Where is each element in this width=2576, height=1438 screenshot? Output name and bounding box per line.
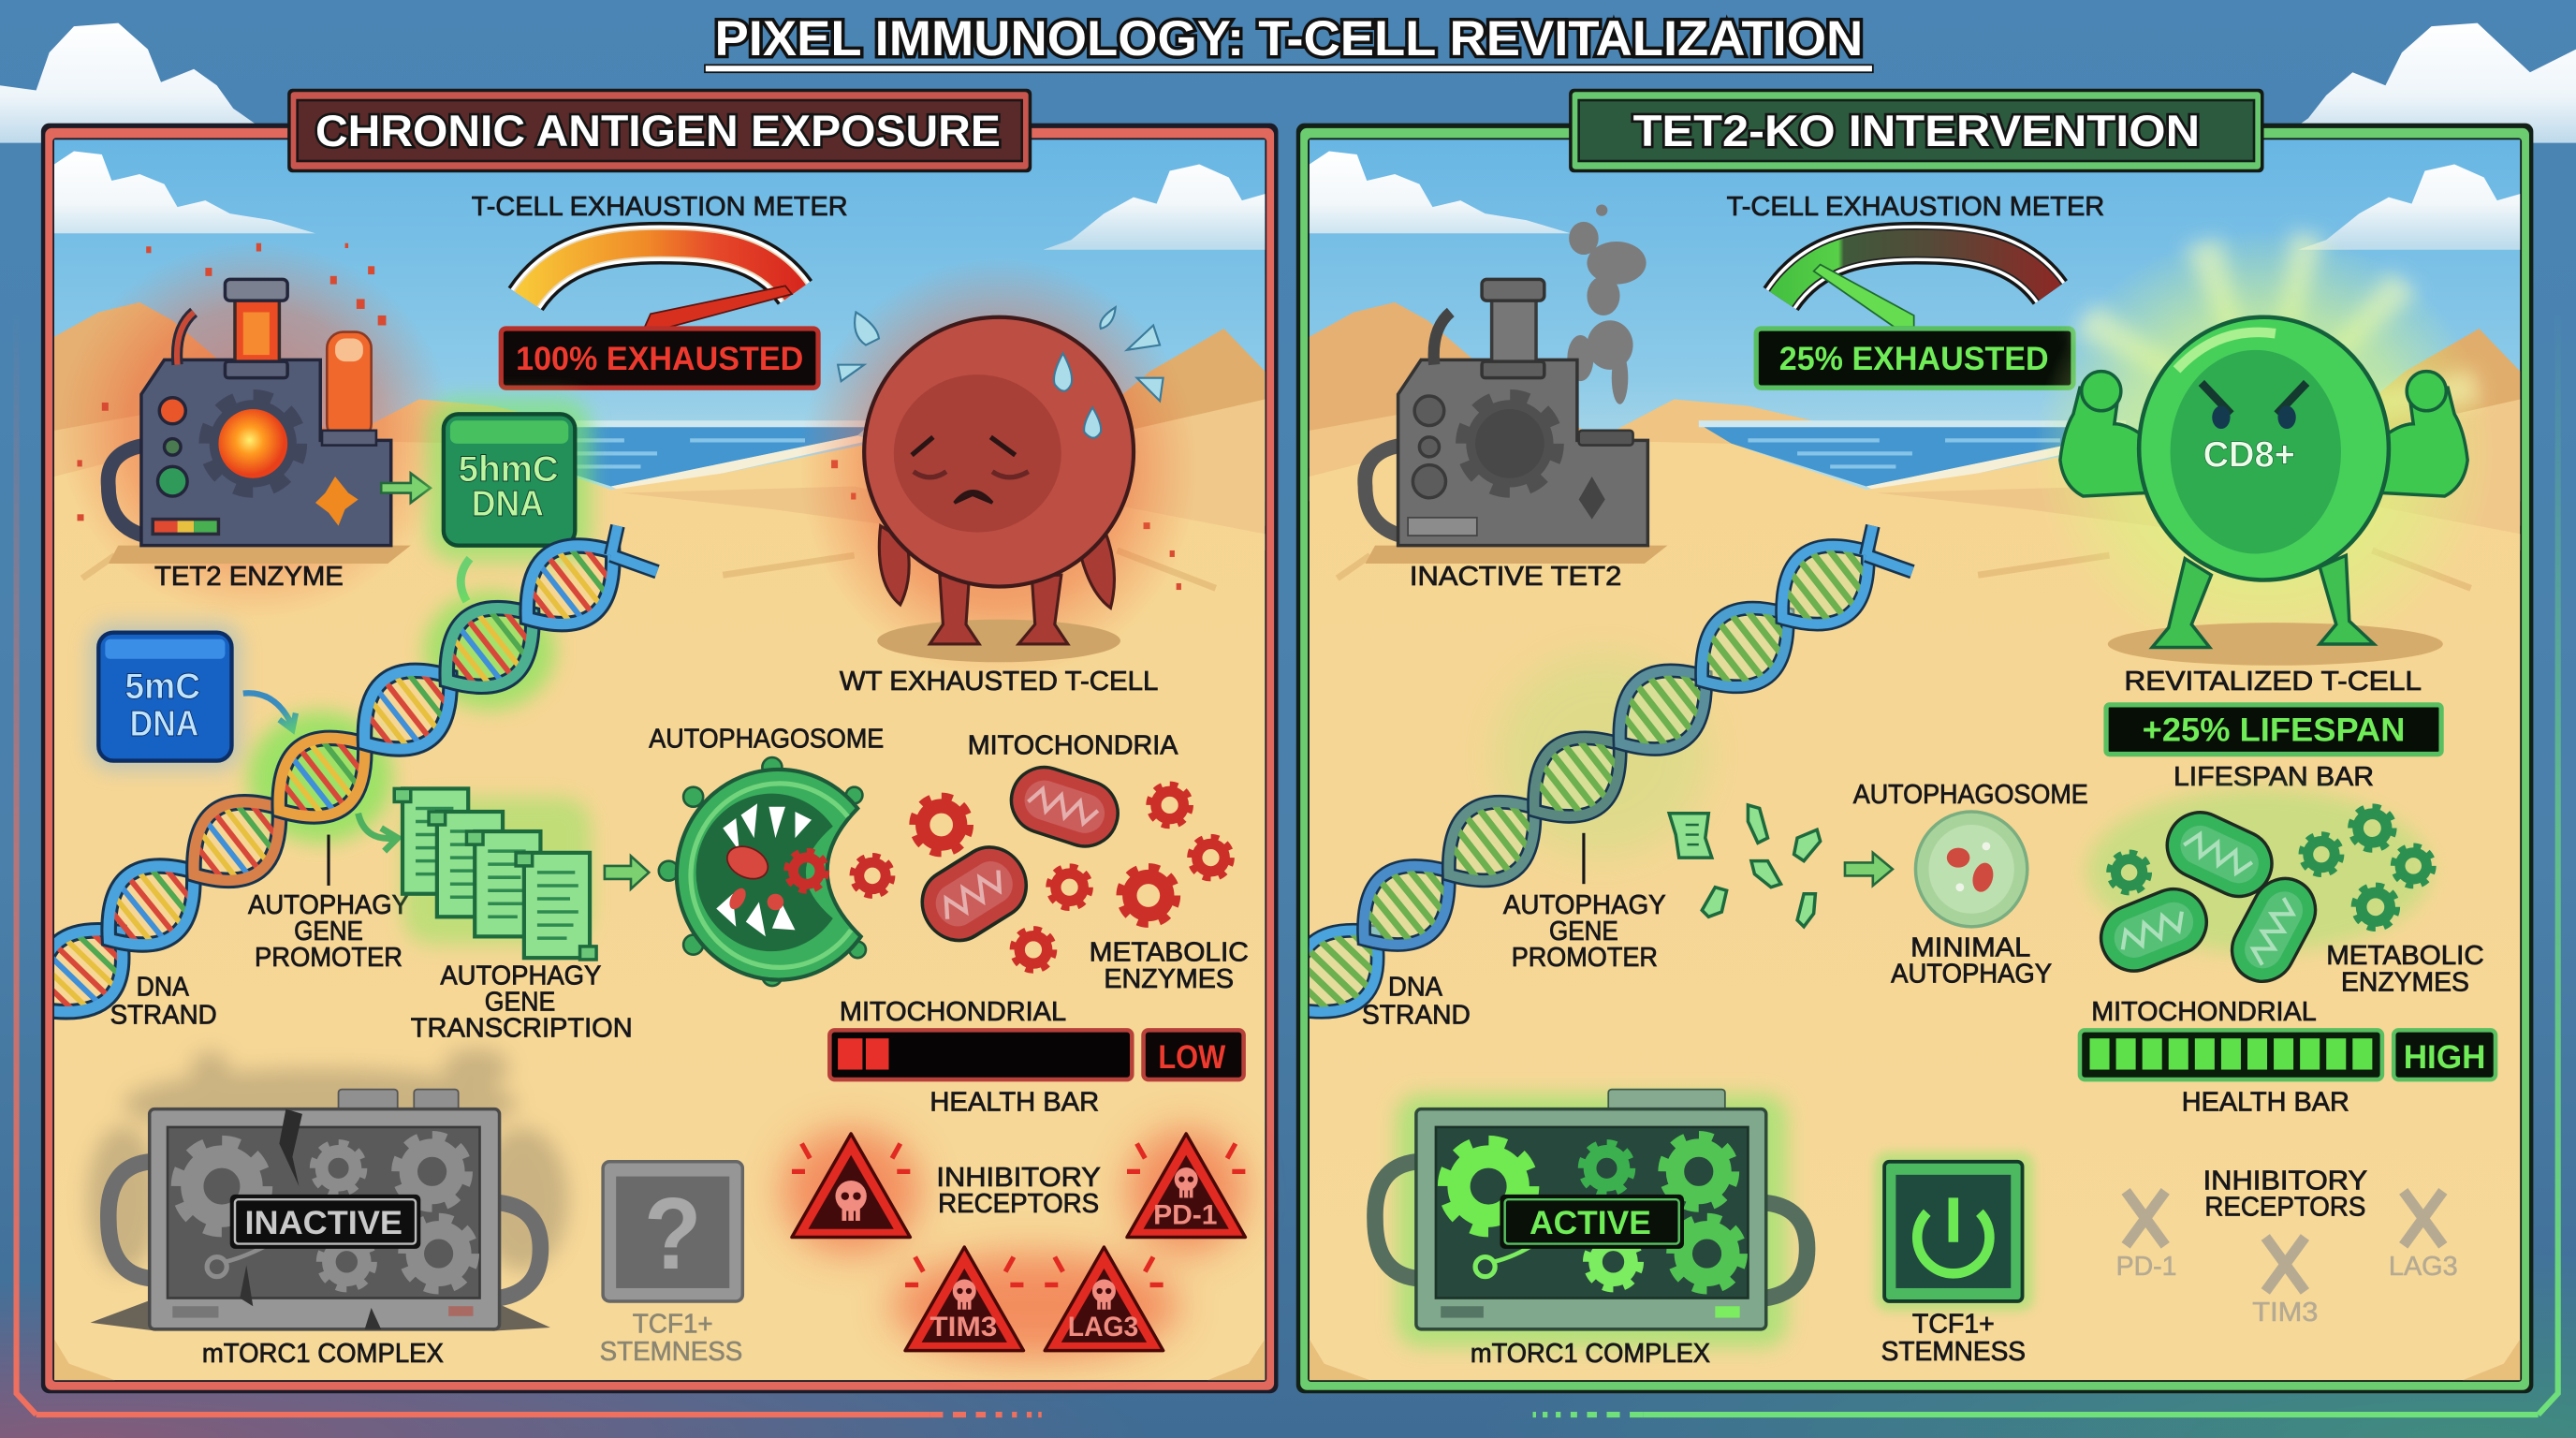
- DNA strand: [1272, 521, 1912, 1036]
- TCF1 stemness: power icon: STEMNESS: [1881, 1337, 2026, 1367]
- exhaustion meter: T-CELL EXHAUSTION METER: [1727, 192, 2104, 222]
- autophagy gene transcription scrolls: [359, 788, 633, 1043]
- exhaustion meter: [472, 192, 848, 388]
- 5mC DNA block: 5mC: [124, 667, 200, 707]
- inhibitory receptors: silenced: TIM3: [2252, 1298, 2318, 1328]
- promoter pointer and label: AUTOPHAGY: [1503, 890, 1666, 920]
- minimal autophagosome: AUTOPHAGOSOME: [1853, 780, 2088, 810]
- label: DNA strand: DNA: [1388, 973, 1443, 1003]
- inhibitory receptors: upregulated: LAG3: [1068, 1312, 1138, 1343]
- outer frame line: red: [17, 312, 1042, 1415]
- clouds: top left: [0, 23, 283, 143]
- promoter pointer and label: PROMOTER: [1512, 943, 1658, 973]
- inactive TET2 machine: [1365, 279, 1667, 564]
- arrow: TET2 to 5hmC: [381, 473, 431, 503]
- autophagy gene transcription scrolls: TRANSCRIPTION: [411, 1013, 633, 1043]
- label: inactive TET2: INACTIVE TET2: [1410, 562, 1621, 592]
- arrow: transcription to autophagosome: [605, 856, 649, 888]
- mitochondrial health bar: high: [2080, 997, 2496, 1117]
- heading: TET2-KO intervention: [1569, 89, 2264, 172]
- autophagy gene transcription scrolls: AUTOPHAGY: [440, 961, 601, 990]
- lifespan bar: +25% LIFESPAN: [2143, 712, 2405, 749]
- arrow: fragments to autophagosome: [1845, 853, 1893, 886]
- TCF1 stemness: lost: STEMNESS: [600, 1337, 742, 1367]
- promoter pointer and label: GENE: [294, 917, 363, 946]
- promoter pointer and label: AUTOPHAGY: [248, 890, 409, 920]
- inhibitory receptors: silenced: [2116, 1167, 2458, 1328]
- label: DNA strand: STRAND: [110, 1000, 217, 1030]
- outer frame line: green: [1533, 312, 2558, 1415]
- mitochondrial health bar: high: MITOCHONDRIAL: [2091, 997, 2317, 1027]
- mitochondria and metabolic enzymes: METABOLIC: [1090, 938, 1249, 968]
- red sparks: [77, 243, 1181, 590]
- mitochondrial health bar: low: HEALTH BAR: [929, 1087, 1099, 1117]
- 5hmC DNA block: [427, 398, 592, 562]
- WT exhausted T-cell: [798, 258, 1199, 697]
- healthy mitochondria and metabolic enzymes: METABOLIC: [2326, 941, 2484, 971]
- lifespan bar: [2106, 705, 2441, 792]
- mTORC1 complex: inactive: [87, 1049, 568, 1369]
- inhibitory receptors: upregulated: [782, 1129, 1245, 1358]
- curved arrow: 5hmC to DNA: [461, 559, 470, 601]
- label: DNA strand: STRAND: [1362, 1000, 1471, 1030]
- minimal autophagosome: MINIMAL: [1910, 932, 2030, 962]
- inhibitory receptors: upregulated: RECEPTORS: [938, 1189, 1099, 1219]
- healthy mitochondria and metabolic enzymes: [2086, 788, 2484, 997]
- label: DNA strand: [1362, 973, 1471, 1030]
- revitalized T-cell: CD8+: [2203, 434, 2295, 475]
- mitochondria and metabolic enzymes: MITOCHONDRIA: [968, 731, 1178, 761]
- mTORC1 complex: active: [1375, 1090, 1808, 1369]
- heading: chronic antigen exposure: CHRONIC ANTIGEN EXPOSURE: [315, 107, 1001, 156]
- clouds: top right: [2274, 23, 2576, 143]
- label: DNA strand: [110, 973, 217, 1030]
- revitalized T-cell: [2034, 230, 2494, 697]
- heading: TET2-KO intervention: TET2-KO INTERVENTION: [1633, 107, 2200, 156]
- revitalized T-cell: REVITALIZED T-CELL: [2124, 667, 2422, 697]
- mTORC1 complex: inactive: INACTIVE: [245, 1205, 402, 1241]
- panel: TET2-KO intervention: [1272, 89, 2533, 1393]
- exhaustion meter: T-CELL EXHAUSTION METER: [472, 192, 848, 222]
- curved arrow: 5mC to DNA: [243, 693, 296, 729]
- TCF1 stemness: power icon: [1875, 1152, 2034, 1367]
- mTORC1 complex: active: ACTIVE: [1530, 1205, 1651, 1241]
- mitochondrial health bar: low: LOW: [1158, 1039, 1226, 1076]
- mTORC1 complex: inactive: mTORC1 COMPLEX: [202, 1339, 444, 1369]
- 5hmC DNA block: DNA: [472, 484, 544, 524]
- smoke: [1567, 205, 1647, 404]
- mitochondrial health bar: high: HEALTH BAR: [2182, 1087, 2349, 1117]
- inhibitory receptors: silenced: PD-1: [2116, 1252, 2177, 1282]
- panel: chronic antigen exposure: [17, 89, 1278, 1393]
- 5hmC DNA block: 5hmC: [459, 449, 559, 490]
- TCF1 stemness: power icon: TCF1+: [1912, 1309, 1995, 1339]
- mitochondrial health bar: high: HIGH: [2404, 1039, 2485, 1076]
- 5mC DNA block: DNA: [130, 704, 198, 744]
- mitochondrial health bar: low: [829, 997, 1244, 1117]
- inhibitory receptors: upregulated: INHIBITORY: [936, 1163, 1101, 1193]
- mitochondria and metabolic enzymes: [909, 731, 1249, 994]
- TCF1 stemness: lost: TCF1+: [633, 1309, 713, 1339]
- mTORC1 complex: active: mTORC1 COMPLEX: [1471, 1339, 1710, 1369]
- 5mC DNA block: [89, 623, 242, 770]
- heading: chronic antigen exposure: [287, 89, 1032, 172]
- inhibitory receptors: upregulated: TIM3: [929, 1312, 997, 1343]
- TET2 enzyme machine: [57, 242, 452, 620]
- promoter pointer and label: [248, 835, 409, 973]
- healthy mitochondria and metabolic enzymes: ENZYMES: [2341, 967, 2469, 997]
- lifespan bar: LIFESPAN BAR: [2174, 762, 2374, 792]
- TCF1 stemness: lost: [600, 1162, 742, 1367]
- label: TET2 enzyme: TET2 ENZYME: [154, 562, 344, 592]
- inhibitory receptors: silenced: LAG3: [2389, 1252, 2458, 1282]
- minimal autophagosome: AUTOPHAGY: [1891, 960, 2052, 990]
- inhibitory receptors: upregulated: PD-1: [1153, 1199, 1218, 1230]
- title: PIXEL IMMUNOLOGY: T-CELL REVITALIZATION: [714, 11, 1863, 66]
- promoter pointer and label: GENE: [1549, 917, 1618, 946]
- autophagosome: AUTOPHAGOSOME: [649, 725, 884, 755]
- promoter pointer and label: [1503, 833, 1666, 973]
- inhibitory receptors: silenced: INHIBITORY: [2203, 1167, 2367, 1196]
- mitochondria and metabolic enzymes: ENZYMES: [1104, 964, 1234, 994]
- WT exhausted T-cell: WT EXHAUSTED T-CELL: [840, 667, 1158, 697]
- autophagosome: [649, 725, 892, 986]
- mitochondrial health bar: low: MITOCHONDRIAL: [840, 997, 1066, 1027]
- exhaustion meter: 25% EXHAUSTED: [1779, 341, 2049, 377]
- fragmented transcripts: [1669, 805, 1821, 927]
- autophagy gene transcription scrolls: GENE: [485, 987, 555, 1017]
- label: DNA strand: DNA: [137, 973, 189, 1003]
- DNA strand: [17, 521, 657, 1036]
- exhaustion meter: [1727, 192, 2104, 388]
- exhaustion meter: 100% EXHAUSTED: [516, 341, 803, 377]
- promoter pointer and label: PROMOTER: [255, 943, 402, 973]
- inhibitory receptors: silenced: RECEPTORS: [2204, 1193, 2365, 1223]
- minimal autophagosome: [1853, 780, 2088, 990]
- TCF1 stemness: lost: ?: [644, 1177, 701, 1291]
